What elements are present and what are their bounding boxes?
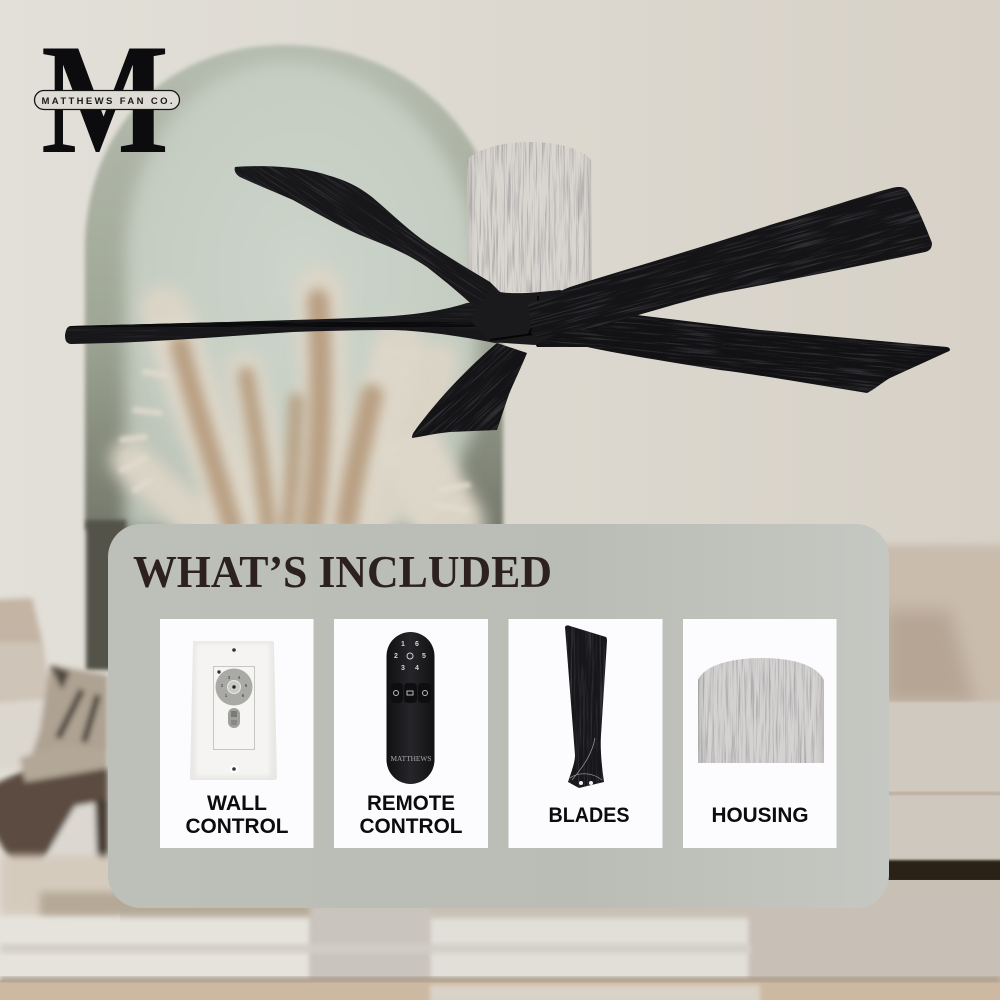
icon: remote control: 3 — [401, 665, 405, 672]
fan hub — [472, 290, 562, 345]
fan housing — [467, 142, 592, 292]
left armchair and throw — [0, 598, 108, 888]
ceiling fan — [65, 142, 950, 438]
right sofa — [880, 545, 1000, 882]
icon: wall control: 3 — [228, 675, 231, 680]
fan blade: upper left — [234, 166, 500, 306]
icon: remote control: 1 — [401, 641, 405, 648]
fan blade: upper right — [528, 187, 932, 336]
heading: WHAT’S INCLUDED — [133, 546, 552, 597]
label: blades: BLADES — [548, 804, 630, 827]
icon: blade — [565, 625, 607, 788]
icon: remote control: 6 — [415, 641, 419, 648]
floor and rug — [0, 855, 1000, 1000]
logo: Matthews Fan Co.: M — [41, 12, 169, 187]
pampas grass — [122, 290, 468, 525]
logo: Matthews Fan Co.: MATTHEWS FAN CO. — [42, 96, 172, 107]
card: housing — [683, 619, 836, 848]
card: blades — [508, 619, 662, 848]
card: remote control — [334, 619, 488, 848]
fan blade: lower left — [412, 343, 527, 438]
icon: remote control: 5 — [422, 653, 426, 660]
panel: what's included — [108, 524, 889, 908]
icon: wall control — [190, 641, 277, 780]
icon: housing — [695, 655, 827, 765]
icon: remote control — [386, 632, 434, 784]
icon: wall control: 6 — [242, 693, 245, 698]
arch niche — [85, 45, 503, 670]
icon: remote control: MATTHEWS — [390, 755, 432, 763]
icon: wall control: 5 — [245, 683, 248, 688]
label: wall control — [186, 792, 289, 838]
label: remote control: CONTROL — [360, 815, 463, 838]
icon: wall control: 2 — [221, 683, 224, 688]
label: wall control: WALL — [207, 792, 267, 815]
fan blade: left — [65, 302, 502, 344]
card: wall control — [160, 619, 314, 848]
icon: wall control: 1 — [225, 693, 228, 698]
label: remote control — [360, 792, 463, 838]
label: remote control: REMOTE — [367, 792, 455, 815]
icon: wall control: 4 — [238, 675, 241, 680]
icon: remote control: 4 — [415, 665, 419, 672]
label: housing: HOUSING — [712, 804, 808, 827]
label: wall control: CONTROL — [186, 815, 289, 838]
fan blade: lower right — [536, 315, 950, 393]
icon: remote control: 2 — [394, 653, 398, 660]
